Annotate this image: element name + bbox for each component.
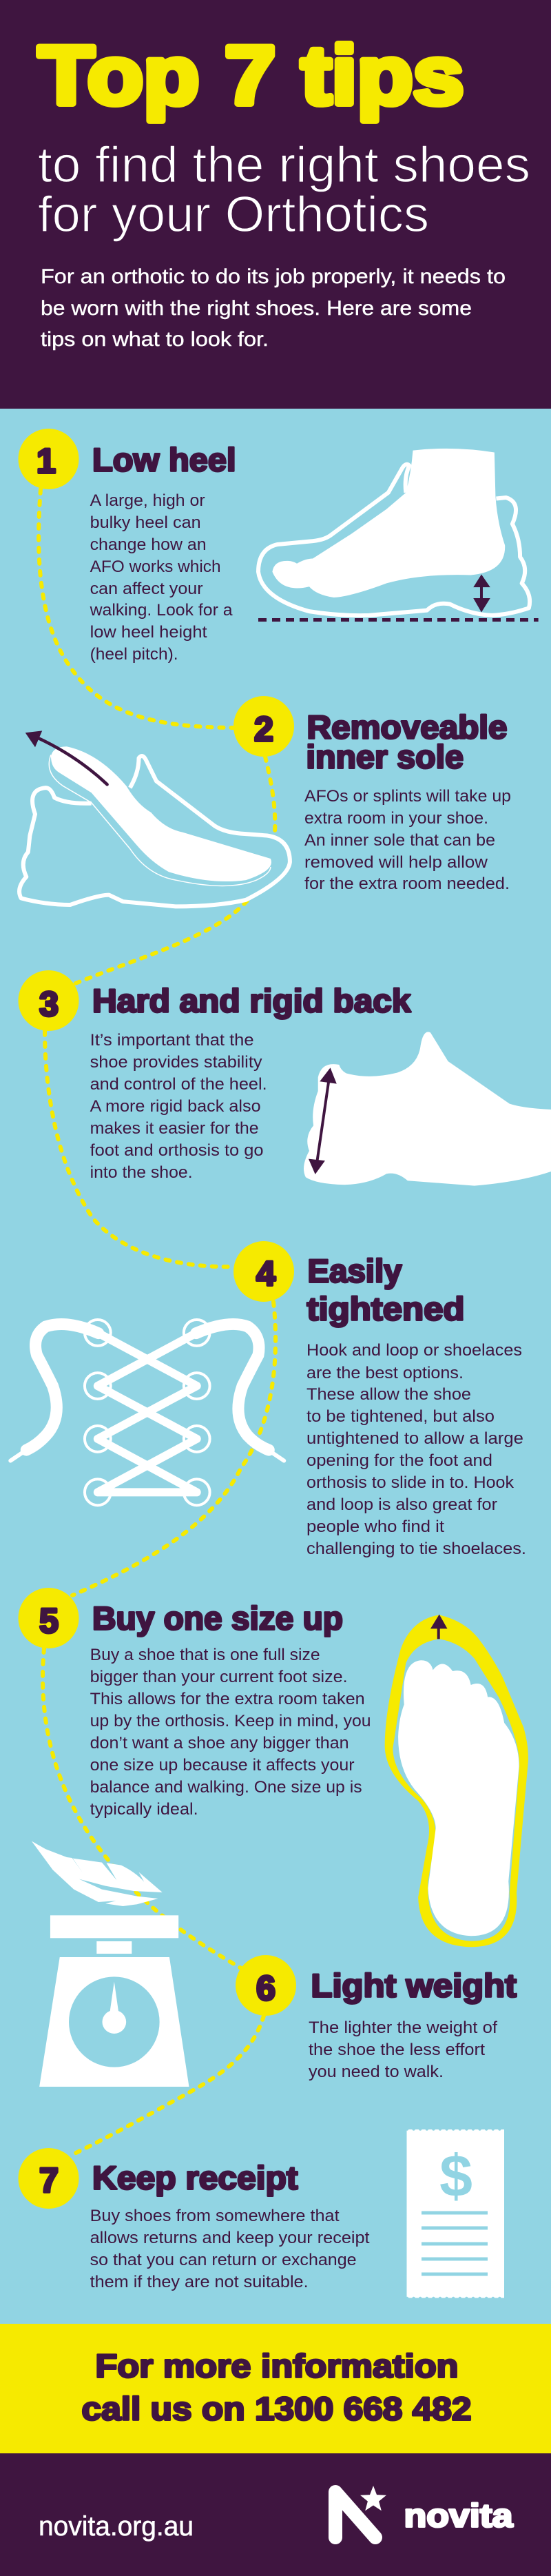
heading: buy one size up: Buy one size up <box>92 1600 343 1636</box>
body text tip 7: so that you can return or exchange <box>90 2251 357 2269</box>
body text tip 7: Buy shoes from somewhere that <box>90 2207 340 2225</box>
body text tip 5: up by the orthosis. Keep in mind, you <box>90 1712 371 1730</box>
heading: removeable inner sole: Removeable <box>307 708 507 746</box>
logo: novita <box>335 2486 513 2537</box>
body text tip 2 <box>304 787 511 893</box>
body text tip 1: (heel pitch). <box>90 645 178 664</box>
body text tip 5 <box>90 1646 371 1819</box>
body text tip 5: bigger than your current foot size. <box>90 1668 348 1686</box>
body text tip 2: An inner sole that can be <box>304 831 495 850</box>
body text tip 4: to be tightened, but also <box>306 1407 495 1426</box>
intro text: tips on what to look for. <box>41 328 269 351</box>
heading: low heel: Low heel <box>92 441 236 478</box>
tip 7: keep receipt <box>18 2129 504 2298</box>
icon: feather <box>32 1841 163 1906</box>
call to action text: For more information <box>95 2347 459 2384</box>
header panel <box>0 0 551 409</box>
body text tip 6: you need to walk. <box>309 2063 444 2081</box>
body text tip 5: typically ideal. <box>90 1800 198 1819</box>
heading: removeable inner sole: inner sole <box>306 739 464 775</box>
logo: novita: novita <box>404 2497 513 2533</box>
tip 5: buy one size up <box>18 1588 528 1947</box>
tip 4: easily tightened <box>10 1241 526 1558</box>
icon: receipt: $ <box>439 2143 472 2209</box>
intro text <box>41 265 506 351</box>
body text tip 1: change how an <box>90 535 207 554</box>
body text tip 4: people who find it <box>306 1517 444 1536</box>
website address: novita.org.au <box>39 2511 194 2542</box>
call to action band <box>0 2324 551 2453</box>
body text tip 3: makes it easier for the <box>90 1119 259 1138</box>
body text tip 5: balance and walking. One size up is <box>90 1778 362 1797</box>
icon: foot in low heel shoe <box>258 449 539 620</box>
tip 2: removeable inner sole <box>19 696 511 906</box>
body text tip 4: and loop is also great for <box>306 1495 497 1514</box>
tip 1: low heel <box>18 429 539 664</box>
body text tip 3 <box>90 1031 267 1182</box>
number badge 5: 5 <box>39 1602 59 1640</box>
body text tip 6: the shoe the less effort <box>309 2041 485 2059</box>
body text tip 6 <box>309 2018 497 2081</box>
number badge 7: 7 <box>39 2161 59 2200</box>
body text tip 5: Buy a shoe that is one full size <box>90 1646 320 1664</box>
footer band <box>0 2453 551 2576</box>
body text tip 7: allows returns and keep your receipt <box>90 2229 370 2247</box>
icon: shoe with removable insole <box>19 730 290 906</box>
body text tip 5: one size up because it affects your <box>90 1756 355 1775</box>
subtitle: for your Orthotics <box>38 187 429 243</box>
body text tip 7 <box>90 2207 370 2291</box>
subtitle: to find the right shoes <box>38 137 530 193</box>
title: Top 7 tips <box>39 29 464 121</box>
body text tip 1: low heel height <box>90 623 207 642</box>
body text tip 4: are the best options. <box>306 1364 464 1382</box>
body text tip 7: them if they are not suitable. <box>90 2273 309 2291</box>
number badge 6 <box>236 1955 296 2016</box>
body text tip 2: extra room in your shoe. <box>304 809 488 828</box>
icon: shoe heel with arrow <box>304 1032 551 1186</box>
body text tip 2: for the extra room needed. <box>304 875 510 893</box>
number badge 6: 6 <box>256 1969 276 2007</box>
number badge 5 <box>18 1588 79 1648</box>
body text tip 4: challenging to tie shoelaces. <box>306 1540 526 1558</box>
body text tip 3: A more rigid back also <box>90 1097 261 1116</box>
body text tip 3: It’s important that the <box>90 1031 254 1050</box>
body text tip 1 <box>90 491 233 664</box>
body text tip 4: Hook and loop or shoelaces <box>306 1341 522 1360</box>
body text tip 3: and control of the heel. <box>90 1075 267 1094</box>
number badge 3 <box>18 970 79 1031</box>
heading: hard and rigid back: Hard and rigid back <box>92 983 411 1019</box>
icon: foot sole with size margin <box>385 1615 528 1947</box>
icon: shoelaces <box>10 1320 284 1505</box>
body text tip 3: foot and orthosis to go <box>90 1141 264 1160</box>
body text tip 4: These allow the shoe <box>306 1385 471 1404</box>
body text tip 3: into the shoe. <box>90 1163 193 1182</box>
number badge 4 <box>233 1241 294 1302</box>
number badge 1: 1 <box>37 442 56 480</box>
body text tip 4: orthosis to slide in to. Hook <box>306 1473 514 1492</box>
number badge 7 <box>18 2148 79 2209</box>
body text tip 1: AFO works which <box>90 558 221 576</box>
dashed connector path between tips <box>39 489 276 2156</box>
intro text: be worn with the right shoes. Here are some <box>41 297 472 320</box>
tip 6: light weight <box>32 1841 517 2087</box>
call to action text <box>81 2347 471 2427</box>
body text tip 5: don’t want a shoe any bigger than <box>90 1734 349 1752</box>
call to action text: call us on 1300 668 482 <box>81 2390 471 2427</box>
body text tip 1: A large, high or <box>90 491 205 510</box>
number badge 2 <box>233 696 294 757</box>
heading: easily tightened <box>307 1253 464 1327</box>
intro text: For an orthotic to do its job properly, it needs to <box>41 265 506 288</box>
body text tip 1: bulky heel can <box>90 513 201 532</box>
body text tip 2: AFOs or splints will take up <box>304 787 511 806</box>
body text tip 6: The lighter the weight of <box>309 2018 497 2037</box>
heading: keep receipt: Keep receipt <box>92 2160 298 2196</box>
tip 3: hard and rigid back <box>18 970 551 1186</box>
number badge 3: 3 <box>39 985 59 1023</box>
heading: light weight: Light weight <box>311 1967 517 2004</box>
body text tip 1: walking. Look for a <box>90 601 233 620</box>
body text tip 4 <box>306 1341 526 1558</box>
heading: easily tightened: Easily <box>307 1253 402 1289</box>
icon: weighing scale <box>39 1915 189 2087</box>
number badge 1 <box>18 429 79 489</box>
body text tip 4: untightened to allow a large <box>306 1429 523 1448</box>
icon: receipt <box>406 2129 504 2298</box>
body text tip 1: can affect your <box>90 580 203 598</box>
heading: easily tightened: tightened <box>307 1290 464 1327</box>
body text tip 5: This allows for the extra room taken <box>90 1690 365 1708</box>
body text tip 4: opening for the foot and <box>306 1451 492 1470</box>
number badge 2: 2 <box>254 710 273 748</box>
body text tip 3: shoe provides stability <box>90 1053 262 1072</box>
number badge 4: 4 <box>256 1254 276 1293</box>
body text tip 2: removed will help allow <box>304 853 488 872</box>
subtitle <box>38 137 530 243</box>
heading: removeable inner sole <box>306 708 507 775</box>
